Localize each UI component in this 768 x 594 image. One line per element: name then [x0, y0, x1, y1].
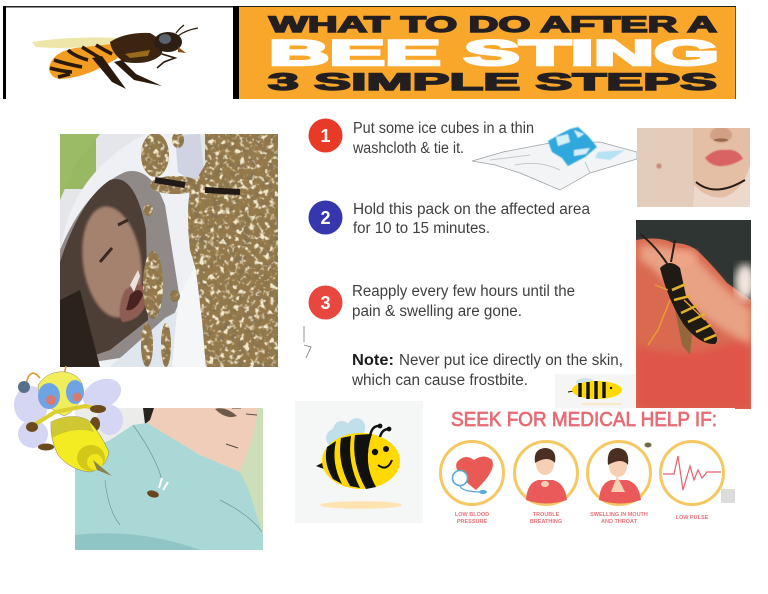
illustration: small bee panel [555, 374, 636, 409]
symptom: low pulse [660, 442, 724, 521]
symptom: low pulse: LOW PULSE [676, 515, 709, 521]
illustration: ice cubes in washcloth [472, 127, 637, 190]
man's head [143, 408, 258, 472]
badge 1 [308, 118, 342, 152]
step 3 text: pain & swelling are gone. [352, 303, 522, 320]
photo: skin and lip swelling [637, 127, 750, 207]
title line 1: WHAT TO DO AFTER A [269, 12, 717, 37]
photo: beekeeper covered in bees [60, 134, 278, 367]
photo: wasp on finger [636, 220, 755, 409]
symptom: swelling in mouth and throat: AND THROAT [601, 519, 638, 525]
step 2 text [353, 201, 590, 237]
symptom: trouble breathing: TROUBLE [533, 512, 560, 518]
step 1 text [352, 120, 534, 157]
step 2 [308, 200, 590, 237]
icon: cartoon bee with stinger [14, 366, 126, 476]
symptom: low blood pressure [440, 442, 504, 525]
step 2 text: for 10 to 15 minutes. [353, 220, 490, 237]
title line 2: BEE STING [269, 34, 719, 73]
badge 3 [308, 286, 342, 320]
symptom: low blood pressure: PRESSURE [457, 519, 487, 525]
panel: seek medical help [435, 408, 735, 528]
step 1 text: washcloth & tie it. [352, 140, 464, 157]
badge 2 [308, 200, 342, 234]
step 1 [308, 118, 534, 157]
symptom: swelling in mouth and throat: SWELLING IN MOUTH [590, 512, 648, 518]
step 3 text [352, 283, 575, 320]
icon: small bee on shirt [146, 478, 168, 499]
wings [326, 416, 368, 448]
illustration: large smiling bee [295, 401, 423, 523]
title line 3: 3 SIMPLE STEPS [268, 69, 717, 96]
badge 1: 1 [320, 126, 331, 146]
wasp [640, 234, 717, 355]
bee swarm [141, 134, 278, 367]
badge 2: 2 [320, 208, 331, 228]
symptom: trouble breathing: BREATHING [530, 519, 562, 525]
title panel [239, 7, 736, 99]
badge 3: 3 [320, 293, 331, 313]
note: Never put ice directly on the skin, [399, 352, 623, 369]
symptom: swelling in mouth and throat [588, 442, 650, 525]
man's shirt [75, 423, 263, 550]
step 2 text: Hold this pack on the affected area [353, 201, 590, 218]
note [351, 352, 623, 389]
symptom: low blood pressure: LOW BLOOD [455, 512, 489, 518]
note: Note: [352, 352, 394, 369]
note: which can cause frostbite. [351, 372, 528, 389]
illustration: man with bee on shoulder [75, 408, 263, 550]
step 1 text: Put some ice cubes in a thin [353, 120, 534, 137]
stripes [326, 434, 376, 489]
header banner [3, 6, 736, 99]
small bee mark [644, 442, 652, 448]
heading: SEEK FOR MEDICAL HELP IF: [451, 409, 717, 431]
symptom: trouble breathing [514, 442, 578, 525]
icon: header bee [32, 25, 198, 89]
step 3 text: Reapply every few hours until the [352, 283, 575, 300]
step 3 [308, 283, 575, 320]
